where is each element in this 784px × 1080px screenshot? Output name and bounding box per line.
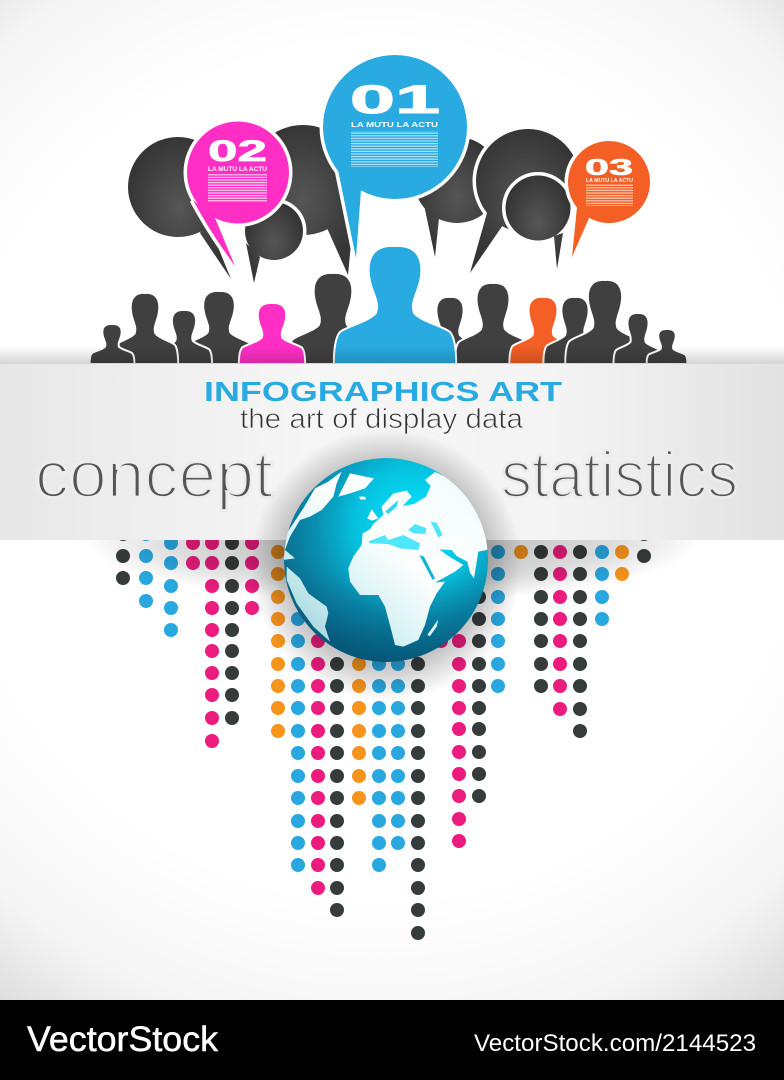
shadow band above banner bbox=[0, 346, 784, 364]
Baltic Sea bbox=[385, 500, 398, 514]
Madagascar bbox=[427, 619, 438, 636]
orange column bbox=[271, 545, 285, 738]
pink partial dot bbox=[434, 634, 448, 648]
orange column bbox=[615, 545, 629, 581]
globe bbox=[283, 458, 490, 662]
dark column bbox=[225, 536, 239, 725]
footer logo: VectorStock bbox=[27, 1020, 219, 1059]
footer background bbox=[0, 1000, 784, 1080]
pink column bbox=[245, 536, 259, 615]
globe halo shadow bbox=[250, 429, 522, 701]
magenta speech bubble 02 bbox=[187, 122, 289, 266]
dark speech bubble F bbox=[506, 176, 570, 269]
dark column bbox=[411, 657, 425, 940]
dark speech bubble D bbox=[414, 137, 500, 257]
dark speech bubble E bbox=[470, 129, 580, 273]
word: concept: concept bbox=[35, 438, 273, 511]
person 12 bbox=[565, 280, 645, 364]
footer url: VectorStock.com/2144523 bbox=[474, 1030, 756, 1057]
bubble 02 small heading: LA MUTU LA ACTU bbox=[208, 166, 267, 173]
banner panel bbox=[0, 364, 784, 540]
bubble 02 text lines bbox=[208, 173, 267, 202]
blue column bbox=[372, 657, 386, 872]
dark speech bubble C bbox=[245, 202, 303, 283]
person 3 bbox=[156, 310, 212, 364]
bubble 01 small heading: LA MUTU LA ACTU bbox=[351, 120, 438, 129]
title: INFOGRAPHICS ART bbox=[204, 376, 562, 407]
number 02: 02 bbox=[208, 135, 267, 168]
bubble 03 small heading: LA MUTU LA ACTU bbox=[586, 178, 633, 184]
dark column bbox=[472, 590, 486, 803]
dark column bbox=[330, 657, 344, 917]
person 1 bbox=[90, 324, 134, 364]
North America bbox=[283, 472, 342, 560]
blue column bbox=[164, 536, 178, 637]
dark speech bubble A bbox=[128, 137, 231, 279]
South America bbox=[287, 567, 330, 642]
person 9 bbox=[455, 283, 531, 364]
bubble 03 content bbox=[585, 154, 633, 206]
Iceland bbox=[359, 497, 366, 499]
Britain bbox=[367, 509, 378, 521]
continents bbox=[283, 472, 490, 647]
dark column bbox=[637, 527, 651, 563]
globe shading bbox=[294, 584, 484, 662]
orange column bbox=[352, 657, 366, 805]
number 01: 01 bbox=[350, 78, 440, 122]
person 14 bbox=[647, 329, 687, 364]
Red Sea bbox=[419, 555, 435, 580]
ocean bbox=[284, 458, 488, 662]
magenta person bbox=[239, 303, 305, 364]
pink column bbox=[311, 634, 325, 895]
person 6 bbox=[288, 273, 378, 364]
blue column bbox=[491, 545, 505, 693]
bubble 01 text lines bbox=[351, 131, 438, 167]
orange person bbox=[509, 297, 577, 364]
crowd of silhouettes bbox=[90, 246, 687, 364]
dark column bbox=[116, 527, 130, 585]
orange dot bbox=[514, 545, 528, 559]
blue column bbox=[291, 612, 305, 872]
bubble 03 text lines bbox=[586, 184, 633, 206]
bubble 02 content bbox=[208, 135, 267, 202]
dot matrix chart bbox=[116, 527, 651, 940]
bubble 01 content bbox=[350, 78, 440, 167]
Black Sea bbox=[408, 524, 427, 534]
blue column bbox=[139, 527, 153, 608]
pink column bbox=[553, 545, 567, 716]
pink column bbox=[205, 536, 219, 748]
blue person bbox=[334, 246, 456, 364]
blue speech bubble 01 bbox=[323, 55, 467, 258]
person 2 bbox=[112, 293, 178, 364]
pink column bbox=[452, 634, 466, 848]
person 13 bbox=[614, 313, 662, 364]
dark column bbox=[573, 545, 587, 738]
orange speech bubble 03 bbox=[568, 141, 650, 257]
Mediterranean bbox=[369, 535, 420, 550]
Greenland bbox=[338, 473, 374, 497]
Caspian Sea bbox=[431, 522, 443, 537]
person 4 bbox=[182, 291, 256, 364]
person 11 bbox=[543, 297, 607, 364]
pink column bbox=[186, 536, 200, 570]
subtitle: the art of display data bbox=[240, 403, 523, 434]
person 8 bbox=[418, 297, 482, 364]
shadow under banner bbox=[82, 478, 702, 602]
dark column bbox=[534, 545, 548, 693]
Eurasia and Africa bbox=[348, 472, 490, 647]
banner bbox=[0, 364, 784, 540]
footer band bbox=[0, 1000, 784, 1080]
speech bubbles group bbox=[128, 55, 650, 283]
blue column bbox=[595, 545, 609, 626]
blue column bbox=[391, 657, 405, 850]
dark speech bubble B bbox=[248, 125, 358, 275]
word: statistics: statistics bbox=[501, 438, 738, 511]
number 03: 03 bbox=[585, 154, 633, 180]
